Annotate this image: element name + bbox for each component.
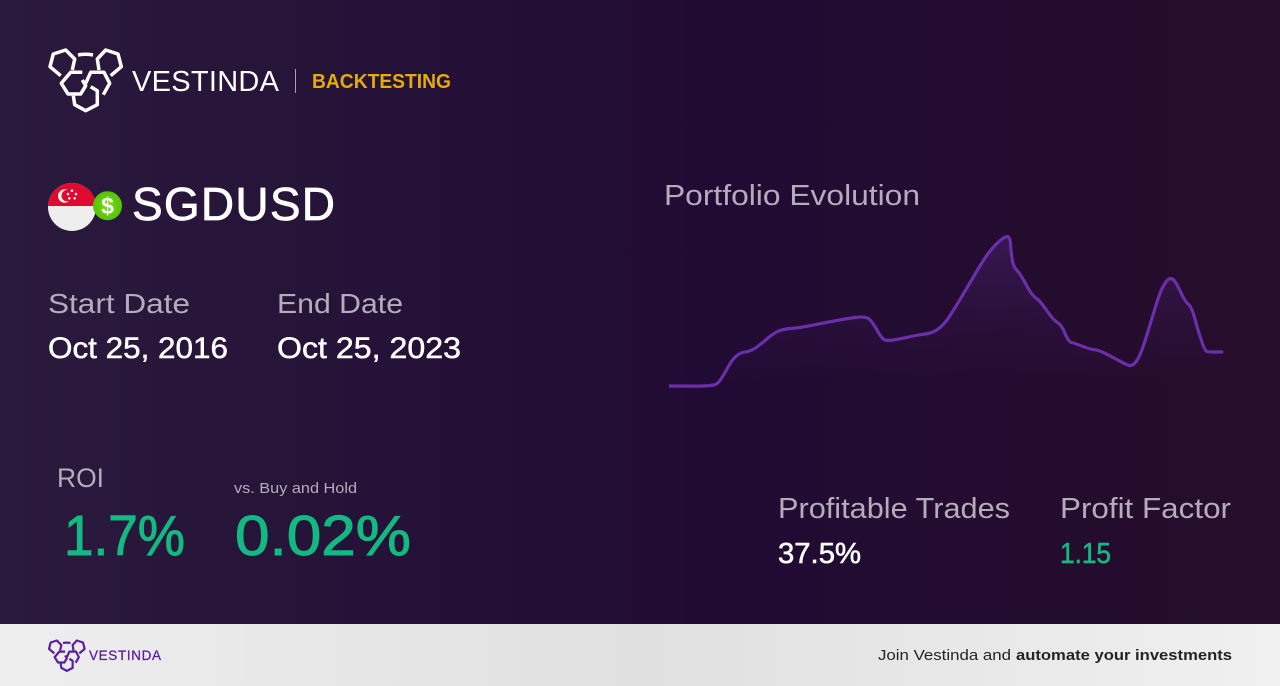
metric: vs. buy and hold <box>234 480 411 568</box>
footer bar <box>0 624 1280 686</box>
start date block: Oct 25, 2016 <box>48 332 228 365</box>
badge: backtesting: BACKTESTING <box>312 71 451 93</box>
chart: portfolio evolution <box>669 236 1223 386</box>
icon: dollar coin <box>93 191 122 220</box>
icon: Singapore flag <box>48 183 96 231</box>
metric: profit factor: 1.15 <box>1060 538 1111 570</box>
icon: hexagon logo <box>50 50 121 111</box>
metric: profitable trades: 37.5% <box>778 538 861 570</box>
footer call to action: Join Vestinda and <box>878 647 1011 664</box>
chart heading: Portfolio Evolution <box>664 180 920 212</box>
metric: ROI: 1.7% <box>64 504 185 568</box>
footer logo <box>49 640 161 671</box>
start date block: Start Date <box>48 288 190 319</box>
header logo <box>50 50 280 111</box>
icon: footer hexagon logo <box>49 640 85 671</box>
title: pair name: SGDUSD <box>132 178 335 230</box>
icon: dollar coin: $ <box>101 193 114 219</box>
metric: profit factor <box>1060 493 1231 570</box>
metric: profitable trades <box>778 493 1010 570</box>
metric: vs. buy and hold: 0.02% <box>235 504 411 568</box>
footer call to action: automate your investments <box>1016 647 1232 664</box>
metric: ROI <box>57 463 185 568</box>
metric: ROI: ROI <box>57 463 104 493</box>
metric: profit factor: Profit Factor <box>1060 493 1231 525</box>
logo wordmark: VESTINDA <box>132 66 280 98</box>
end date block <box>277 288 461 365</box>
metric: vs. buy and hold: vs. Buy and Hold <box>234 480 357 497</box>
metric: profitable trades: Profitable Trades <box>778 493 1010 525</box>
footer logo: VESTINDA <box>89 648 161 663</box>
start date block <box>48 288 228 365</box>
end date block: End Date <box>277 288 403 319</box>
end date block: Oct 25, 2023 <box>277 332 461 365</box>
